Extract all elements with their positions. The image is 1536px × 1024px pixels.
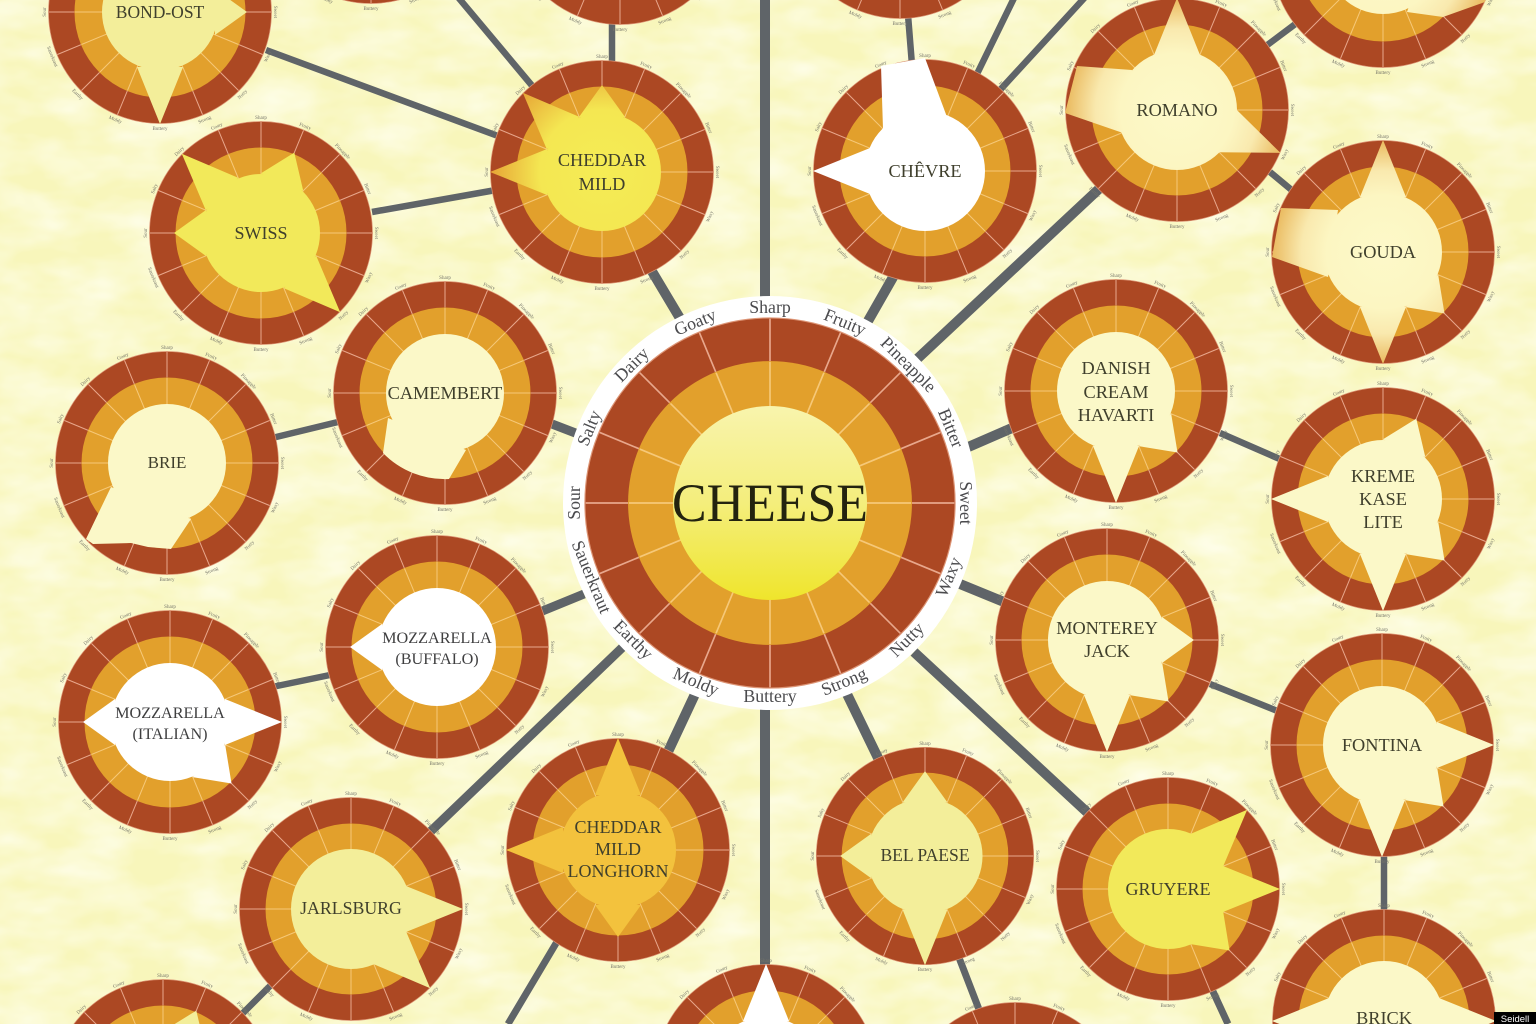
central wheel: Cheese: [563, 296, 977, 710]
flavour shape: [490, 77, 661, 231]
cheese name: KREME: [1351, 466, 1415, 486]
flavour labels ring: Earthy: [610, 616, 657, 663]
wheel: Camembert: [328, 276, 562, 513]
title: CHEESE: [672, 473, 868, 533]
cheese name: GOUDA: [1350, 242, 1417, 262]
cheese name: BEL PAESE: [880, 845, 970, 865]
cheese name: CHÊVRE: [888, 160, 962, 181]
flavour labels ring: Buttery: [743, 686, 797, 706]
flavour shape: [166, 138, 356, 328]
flavour shape: [506, 738, 676, 937]
cheese name: DANISH: [1081, 358, 1151, 378]
cheese name: SWISS: [234, 223, 288, 243]
flavour labels ring: Nutty: [885, 618, 928, 661]
cheese name: CAMEMBERT: [388, 383, 502, 403]
wheel: bottom partial: [904, 997, 1126, 1024]
wheel: Gouda: [1266, 135, 1500, 372]
wheel: Bond-Ost: [43, 0, 277, 132]
flavour labels ring: Sour: [564, 486, 584, 520]
cheese name: ROMANO: [1136, 100, 1218, 120]
flavour labels ring: Sauerkraut: [568, 537, 616, 616]
flavour shape: [163, 1002, 218, 1024]
flavour shape: [1325, 0, 1488, 17]
wheel: Brie: [50, 346, 284, 583]
cheese name: MOZZARELLA: [115, 704, 225, 722]
wheel: top partial centre right: [783, 0, 1017, 27]
wheel: Kreme Kase Lite: [1266, 382, 1500, 619]
flavour labels ring: Salty: [573, 407, 605, 449]
flavour shape: [1271, 410, 1461, 611]
cheese name: MOZZARELLA: [382, 629, 492, 647]
cheese name: BOND-OST: [116, 2, 205, 22]
wheel: Gruyere: [1051, 772, 1285, 1009]
cheese name: MONTEREY: [1056, 618, 1158, 638]
flavour labels ring: Goaty: [671, 304, 719, 339]
flavour shape: [383, 334, 504, 479]
flavour shape: [291, 849, 463, 1004]
flavour shape: [1057, 332, 1194, 503]
flavour shape: [1272, 140, 1461, 364]
flavour shape: [350, 588, 496, 706]
flavour shape: [1065, 0, 1289, 174]
wheel: Mozzarella Buffalo: [320, 530, 554, 767]
cheese name: FONTINA: [1342, 735, 1423, 755]
wheel: Cheddar Mild Longhorn: LONGHORN: [568, 861, 668, 881]
wheel: Cheddar Mild: MILD: [579, 174, 625, 194]
flavour labels ring: Pineapple: [877, 333, 941, 396]
flavour shape: [707, 964, 825, 1024]
wheel: Cheddar Mild: [485, 55, 719, 292]
flavour labels ring: Sharp: [749, 297, 791, 317]
wheel: Swiss: [144, 116, 378, 353]
cheese name: CHEDDAR: [574, 817, 662, 837]
flavour labels ring: Strong: [818, 663, 870, 700]
wheel: Chevre: [808, 54, 1042, 291]
wheel: Brick: [1272, 904, 1496, 1024]
wheel: Danish Cream Havarti: HAVARTI: [1078, 405, 1154, 425]
flavour shape: [86, 404, 226, 549]
flavour labels ring: [564, 297, 976, 706]
flavour shape: [83, 663, 282, 800]
flavour shape: [102, 0, 247, 124]
flavour shape: [813, 58, 985, 231]
wheel: Mozzarella Buffalo: (BUFFALO): [395, 650, 479, 668]
flavour shape: [1048, 581, 1194, 752]
flavour labels ring: Sweet: [956, 481, 976, 525]
wheel: Mozzarella Italian: [53, 605, 287, 842]
flavour labels ring: Waxy: [931, 554, 965, 600]
wheel: top right partial: [1266, 0, 1500, 76]
flavour labels ring: Fruity: [821, 304, 869, 340]
flavour shape: [840, 771, 983, 965]
wheel: Kreme Kase Lite: LITE: [1363, 512, 1403, 532]
wheel: Monterey Jack: [990, 523, 1224, 760]
flavour shape: [1323, 686, 1494, 857]
central disc: [673, 406, 867, 600]
wheel: Cheddar Mild Longhorn: MILD: [595, 839, 641, 859]
cheese name: GRUYERE: [1126, 879, 1211, 899]
flavour labels ring: Dairy: [610, 343, 653, 386]
flavour shape: [1272, 961, 1496, 1024]
cheese name: JARLSBURG: [300, 898, 402, 918]
wheel: Monterey Jack: JACK: [1084, 641, 1131, 661]
wheel: Mozzarella Italian: (ITALIAN): [132, 725, 208, 743]
wheel: Jarlsburg: [234, 792, 468, 1024]
wheel: top partial centre left: [503, 0, 737, 33]
credit tag: [1494, 1012, 1536, 1024]
cheese name: BRIE: [148, 453, 186, 472]
wheel: Kreme Kase Lite: KASE: [1359, 489, 1407, 509]
wheel: Cheddar Mild Longhorn: [501, 733, 735, 970]
connector lines between wheels: [238, 0, 1384, 1024]
wheel: top partial left: [254, 0, 488, 12]
wheel: Bel Paese: [811, 742, 1039, 973]
flavour labels ring: Moldy: [670, 663, 722, 700]
wheel: Fontina: [1265, 628, 1499, 865]
cheese name: CHEDDAR: [558, 150, 647, 170]
flavour labels ring: Bitter: [934, 405, 968, 451]
wheel: Romano: [1060, 0, 1294, 230]
wheel: bottom centre partial: [654, 959, 878, 1024]
wheel: Danish Cream Havarti: [999, 274, 1233, 511]
wheel: bottom left partial: [52, 974, 274, 1024]
wheel: Danish Cream Havarti: CREAM: [1083, 382, 1149, 402]
flavour shape: [1108, 794, 1280, 967]
